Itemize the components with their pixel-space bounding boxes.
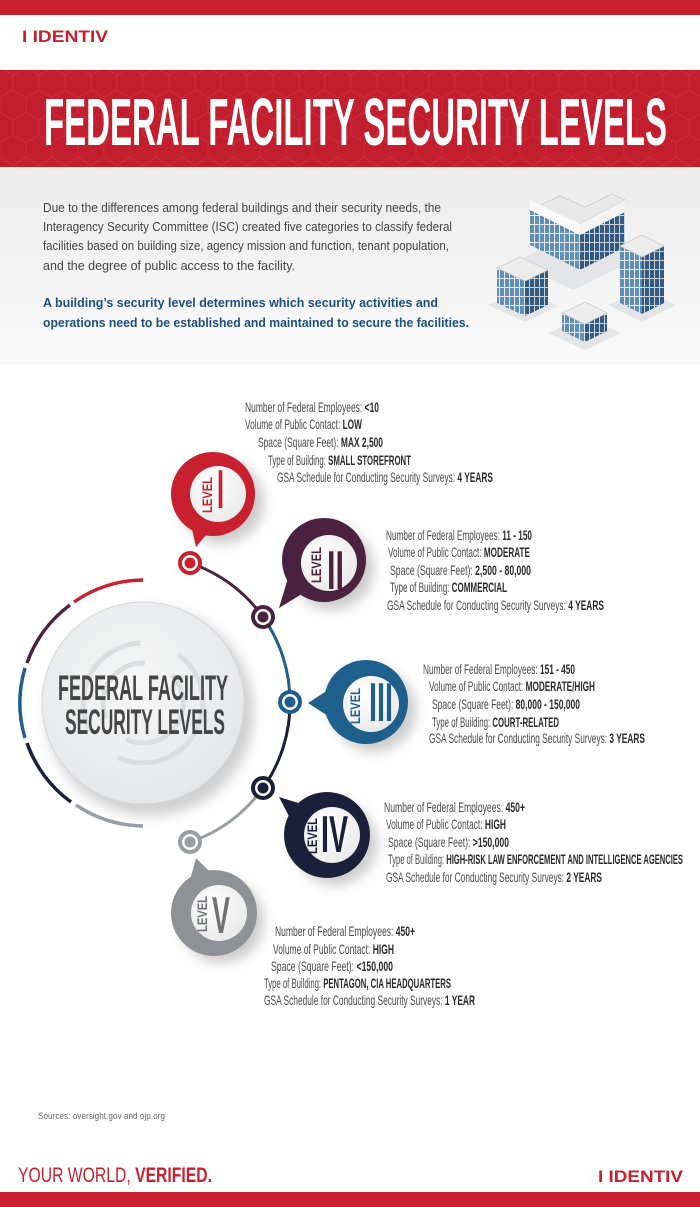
outer ring arcs [20, 580, 143, 826]
central hub: federal facility security levels [20, 580, 254, 826]
badge: level III: III [369, 671, 393, 733]
badge: level III [308, 660, 416, 752]
highlighted statement [43, 296, 469, 330]
text: level III details: Space (Square Feet): 80,000 - 150,000 [432, 696, 580, 712]
text: level V details: Volume of Public Contact: HIGH [273, 941, 394, 957]
badge: level V: V [212, 887, 230, 945]
text: level I details: Volume of Public Contact: LOW [245, 416, 362, 432]
badge: level I: LEVEL [199, 477, 215, 513]
highlighted statement: A building’s security level determines which security activities and [43, 296, 438, 310]
text: level I details: GSA Schedule for Conducting Security Surveys: 4 YEARS [277, 469, 493, 485]
hub title: FEDERAL FACILITY [58, 669, 228, 708]
small building [548, 318, 622, 350]
logo: IDENTIV footer: I IDENTIV [598, 1167, 684, 1186]
sources: Sources: oversight.gov and ojp.org [38, 1111, 165, 1121]
top red bar [0, 0, 700, 15]
text: level V details: Type of Building: PENTAGON, CIA HEADQUARTERS [264, 975, 451, 991]
intro text: facilities based on building size, agency mission and function, tenant population, [43, 239, 449, 253]
logo: IDENTIV top: I IDENTIV [22, 27, 109, 46]
text: level IV details: Space (Square Feet): >150,000 [388, 834, 509, 850]
badge: level IV: LEVEL [304, 818, 320, 854]
icon: buildings [488, 194, 676, 350]
big L building [515, 230, 640, 290]
node markers [178, 551, 302, 854]
badge: level IV: IV [321, 806, 348, 864]
intro text: Interagency Security Committee (ISC) created five categories to classify federal [43, 220, 452, 234]
tagline: YOUR WORLD, VERIFIED. [18, 1164, 212, 1187]
text: level IV details: Number of Federal Employees: 450+ [384, 799, 525, 815]
text: level I details: Number of Federal Employees: <10 [245, 399, 379, 415]
text: level III details: Volume of Public Contact: MODERATE/HIGH [429, 678, 595, 694]
left building [488, 290, 558, 322]
text: level II details: GSA Schedule for Conducting Security Surveys: 4 YEARS [387, 597, 604, 613]
text: level II details [386, 527, 604, 613]
text: level II details: Volume of Public Contact: MODERATE [388, 544, 530, 560]
badge: level V: LEVEL [194, 896, 210, 932]
text: level III details: Number of Federal Employees: 151 - 450 [423, 661, 575, 677]
text: level II details: Space (Square Feet): 2,500 - 80,000 [390, 562, 531, 578]
text: level III details: Type of Building: COURT-RELATED [432, 714, 559, 730]
text: level V details: Number of Federal Employees: 450+ [275, 923, 415, 939]
title banner [0, 70, 700, 167]
right building [608, 290, 676, 322]
text: level I details [245, 399, 493, 485]
text: level IV details [384, 799, 683, 885]
panel: intro [0, 167, 700, 365]
badge: level I [171, 452, 264, 547]
text: level V details [264, 923, 475, 1008]
text: level IV details: GSA Schedule for Conducting Security Surveys: 2 YEARS [386, 869, 602, 885]
highlighted statement: operations need to be established and maintained to secure the facilities. [43, 316, 469, 330]
badge: level II: II [327, 539, 344, 601]
text: level I details: Type of Building: SMALL STOREFRONT [268, 452, 411, 468]
text: level III details [423, 661, 645, 746]
intro text: and the degree of public access to the facility. [43, 259, 295, 273]
connector arc [190, 563, 290, 842]
badge: level I: I [217, 458, 224, 520]
badge: level V [171, 858, 264, 963]
badge: level II [279, 518, 374, 610]
badge: level IV [279, 792, 377, 885]
intro text: Due to the differences among federal buildings and their security needs, the [43, 201, 441, 215]
intro text [43, 201, 452, 273]
central hub: federal facility security levels: SECURITY LEVELS [65, 703, 225, 742]
bottom red bar [0, 1192, 700, 1207]
text: level I details: Space (Square Feet): MAX 2,500 [258, 434, 383, 450]
text: level V details: Space (Square Feet): <150,000 [271, 958, 393, 974]
text: level V details: GSA Schedule for Conducting Security Surveys: 1 YEAR [264, 992, 475, 1008]
badge: level III: LEVEL [347, 688, 363, 724]
badge: level II: LEVEL [308, 547, 324, 583]
text: level IV details: Volume of Public Contact: HIGH [386, 816, 506, 832]
text: level II details: Type of Building: COMMERCIAL [390, 579, 507, 595]
text: level II details: Number of Federal Employees: 11 - 150 [386, 527, 532, 543]
